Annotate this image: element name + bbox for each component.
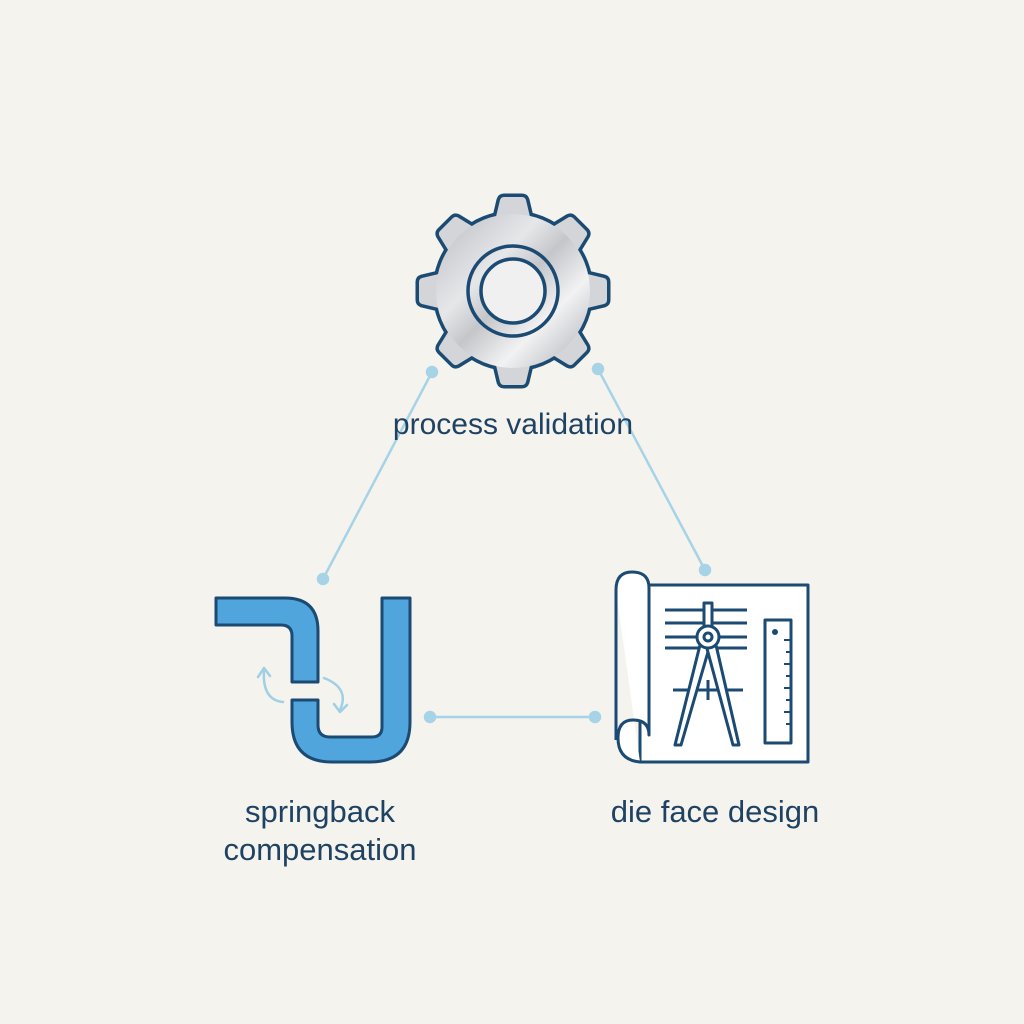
label: springback compensation xyxy=(223,794,416,867)
icon: springback pipe xyxy=(216,598,410,762)
label: springback compensation: springback xyxy=(245,794,395,829)
connector: left triangle edge xyxy=(318,367,437,584)
connector: right triangle edge xyxy=(593,364,710,575)
label: die face design: die face design xyxy=(611,794,819,829)
icon: rotation arrows xyxy=(258,668,347,712)
icon: gear xyxy=(419,197,607,385)
icon: blueprint with compass xyxy=(616,572,808,762)
connector: bottom edge xyxy=(425,712,600,722)
label: process validation: process validation xyxy=(393,408,633,441)
label: springback compensation: compensation xyxy=(223,832,416,867)
